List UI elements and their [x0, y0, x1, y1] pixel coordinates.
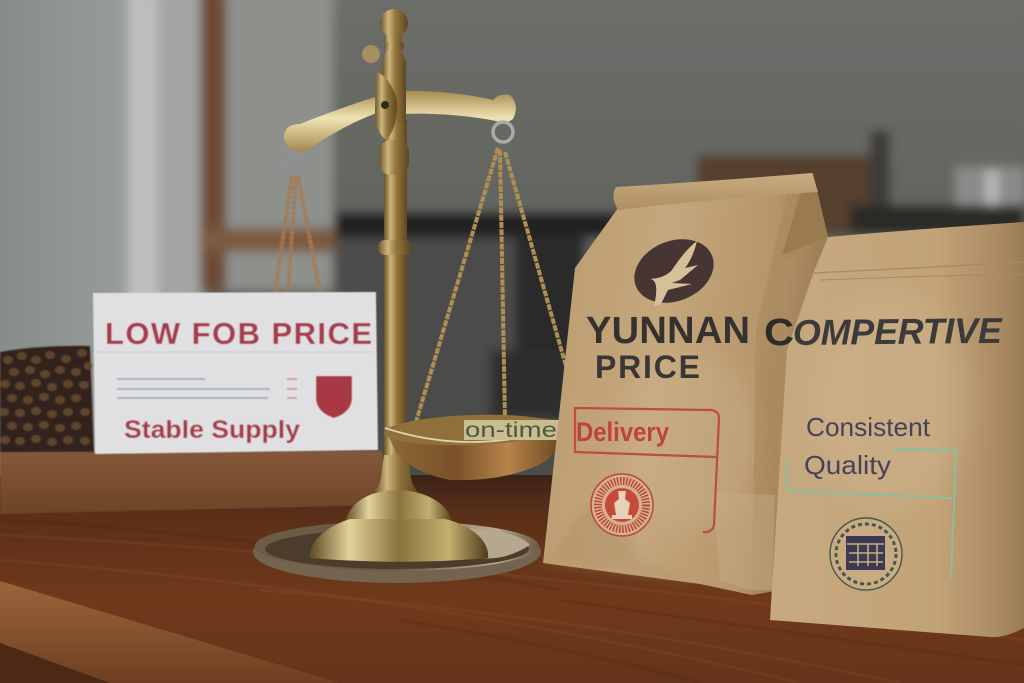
- consistent quality text: [804, 412, 931, 480]
- brass balance scale: [253, 9, 566, 583]
- sign: low FOB price: [93, 292, 378, 454]
- consistent quality text: Consistent: [806, 412, 931, 442]
- left scale chains: [275, 176, 320, 292]
- scale base plate: [253, 521, 541, 583]
- sign subheading: Stable Supply: [124, 416, 300, 444]
- wooden table: [0, 475, 1024, 683]
- pan label: on-time: [465, 419, 557, 442]
- beans on tray: [0, 346, 94, 454]
- scale finial: [362, 9, 408, 140]
- sign heading: LOW FOB PRICE: [105, 316, 372, 351]
- bag 1 price text: PRICE: [595, 349, 700, 385]
- scale rings: [285, 122, 513, 173]
- scale pan: [384, 412, 560, 480]
- icon: red seal: [591, 474, 653, 536]
- delivery box: [575, 408, 719, 532]
- bag 2 big C: C: [764, 312, 794, 354]
- delivery label: Delivery: [576, 417, 669, 447]
- quality box: [787, 449, 956, 578]
- wooden tray: [0, 451, 388, 514]
- icon: leaf logo: [625, 228, 723, 314]
- table front edge: [0, 581, 340, 683]
- bag 1 title: YUNNAN: [586, 310, 750, 352]
- scale domes: [310, 490, 488, 562]
- consistent quality text: Quality: [804, 450, 891, 480]
- bag 2 title: OMPERTIVE: [793, 310, 1003, 353]
- scale post: [374, 120, 418, 492]
- sign fine print: [117, 379, 297, 398]
- right scale chains: [416, 148, 566, 422]
- icon: calendar seal: [830, 518, 902, 590]
- blurred room background: [0, 0, 1024, 510]
- icon: sign shield: [316, 376, 352, 418]
- bag 1 folded top: [613, 173, 818, 210]
- bag 2: competitive: [764, 222, 1024, 637]
- bag 1: Yunnan price: [543, 173, 830, 595]
- scale beam: [284, 91, 516, 152]
